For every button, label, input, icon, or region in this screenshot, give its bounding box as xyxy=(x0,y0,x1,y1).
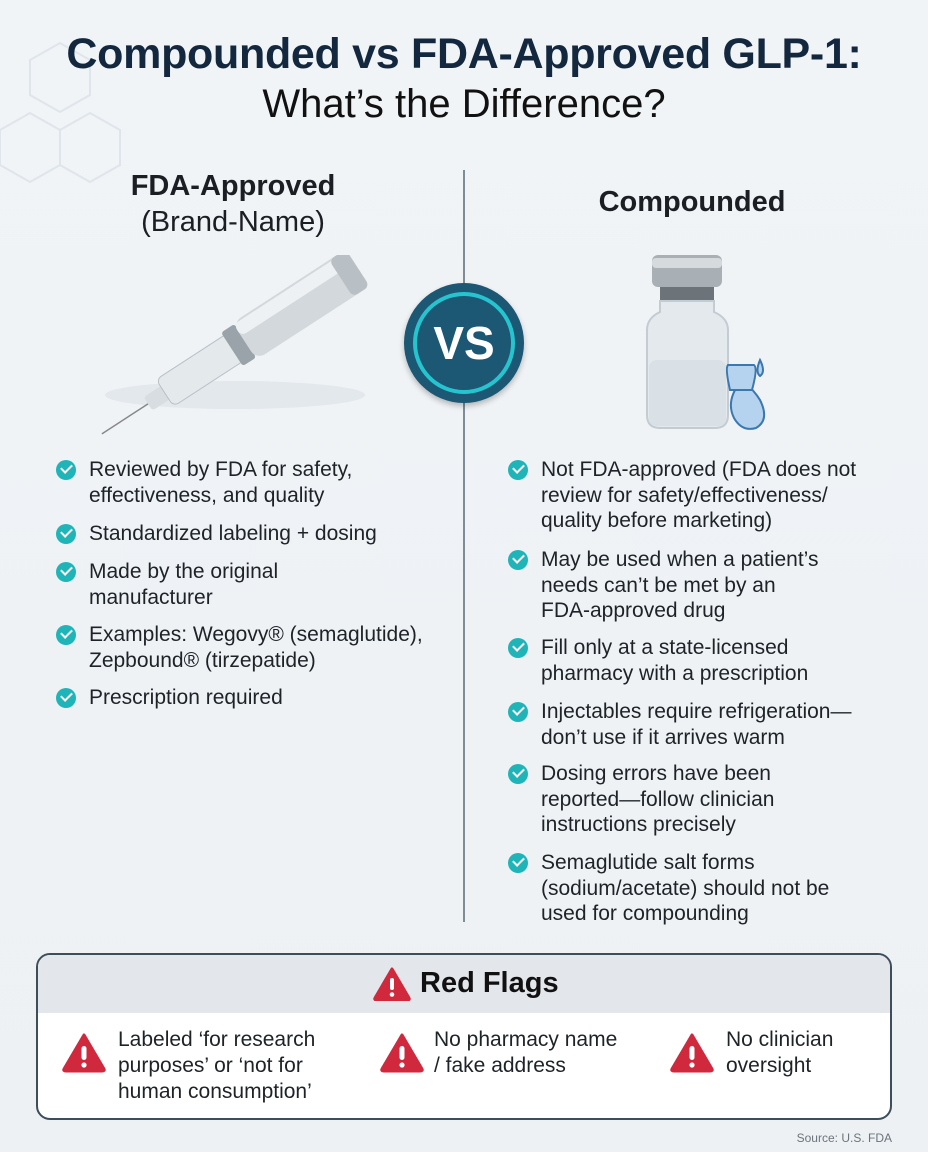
icon: VS badge xyxy=(404,283,524,403)
title: What’s the Difference? xyxy=(262,82,666,126)
list: compounded bullets: pharmacy with a prescription xyxy=(541,662,808,684)
list: compounded bullets: Injectables require refrigeration— xyxy=(541,700,852,723)
flag item 2: / fake address xyxy=(434,1054,566,1077)
list: FDA-approved bullets: Prescription required xyxy=(89,686,283,709)
list: FDA-approved bullets: Standardized labeling + dosing xyxy=(89,522,377,545)
list: FDA-approved bullets: Made by the original xyxy=(89,560,278,583)
list: compounded bullets xyxy=(508,458,856,925)
panel: red flags xyxy=(36,953,892,1120)
flag item 1: human consumption’ xyxy=(118,1080,312,1103)
list: compounded bullets: review for safety/effectiveness/ xyxy=(541,484,828,506)
list: compounded bullets: Semaglutide salt forms xyxy=(541,851,755,874)
flag item 2 xyxy=(380,1028,617,1077)
icon: vial with ice pack xyxy=(646,255,766,430)
list: compounded bullets: Not FDA-approved (FDA does not xyxy=(541,458,856,481)
flag item 3: No clinician xyxy=(726,1028,833,1051)
red flags header xyxy=(38,955,890,1013)
source note: Source: U.S. FDA xyxy=(797,1131,892,1145)
list: compounded bullets: Dosing errors have been xyxy=(541,762,771,785)
flag item 1: Labeled ‘for research xyxy=(118,1028,315,1051)
background hex pattern xyxy=(0,42,121,183)
list: compounded bullets: FDA-approved drug xyxy=(541,599,725,622)
heading: FDA-Approved: (Brand-Name) xyxy=(141,206,325,238)
list: FDA-approved bullets xyxy=(56,458,423,709)
list: FDA-approved bullets: Examples: Wegovy® (semaglutide), xyxy=(89,623,423,646)
title xyxy=(66,30,862,126)
list: compounded bullets: don’t use if it arrives warm xyxy=(541,726,785,748)
flag item 1 xyxy=(62,1028,315,1103)
list: FDA-approved bullets: effectiveness, and quality xyxy=(89,484,324,506)
list: FDA-approved bullets: manufacturer xyxy=(89,586,213,608)
flag item 3 xyxy=(670,1028,833,1077)
list: compounded bullets: May be used when a patient’s xyxy=(541,548,818,571)
list: compounded bullets: Fill only at a state-licensed xyxy=(541,636,788,659)
divider xyxy=(463,170,465,922)
list: compounded bullets: quality before marketing) xyxy=(541,509,772,532)
icon: injection pen xyxy=(102,255,368,434)
list: compounded bullets: used for compounding xyxy=(541,902,749,925)
list: FDA-approved bullets: Zepbound® (tirzepatide) xyxy=(89,648,316,672)
list: FDA-approved bullets: Reviewed by FDA for safety, xyxy=(89,458,352,481)
title: Compounded vs FDA-Approved GLP-1: xyxy=(66,30,862,78)
heading: FDA-Approved xyxy=(131,170,335,238)
icon: VS badge: VS xyxy=(433,317,495,369)
heading: Compounded: Compounded xyxy=(599,186,785,218)
list: compounded bullets: reported—follow clinician xyxy=(541,788,774,810)
list: compounded bullets: instructions precisely xyxy=(541,813,736,836)
flag item 1: purposes’ or ‘not for xyxy=(118,1054,303,1077)
flag item 3: oversight xyxy=(726,1054,811,1077)
list: compounded bullets: (sodium/acetate) should not be xyxy=(541,876,829,900)
red flags header: Red Flags xyxy=(420,967,559,999)
heading: FDA-Approved: FDA-Approved xyxy=(131,170,335,202)
flag item 2: No pharmacy name xyxy=(434,1028,617,1051)
list: compounded bullets: needs can’t be met by an xyxy=(541,574,776,596)
